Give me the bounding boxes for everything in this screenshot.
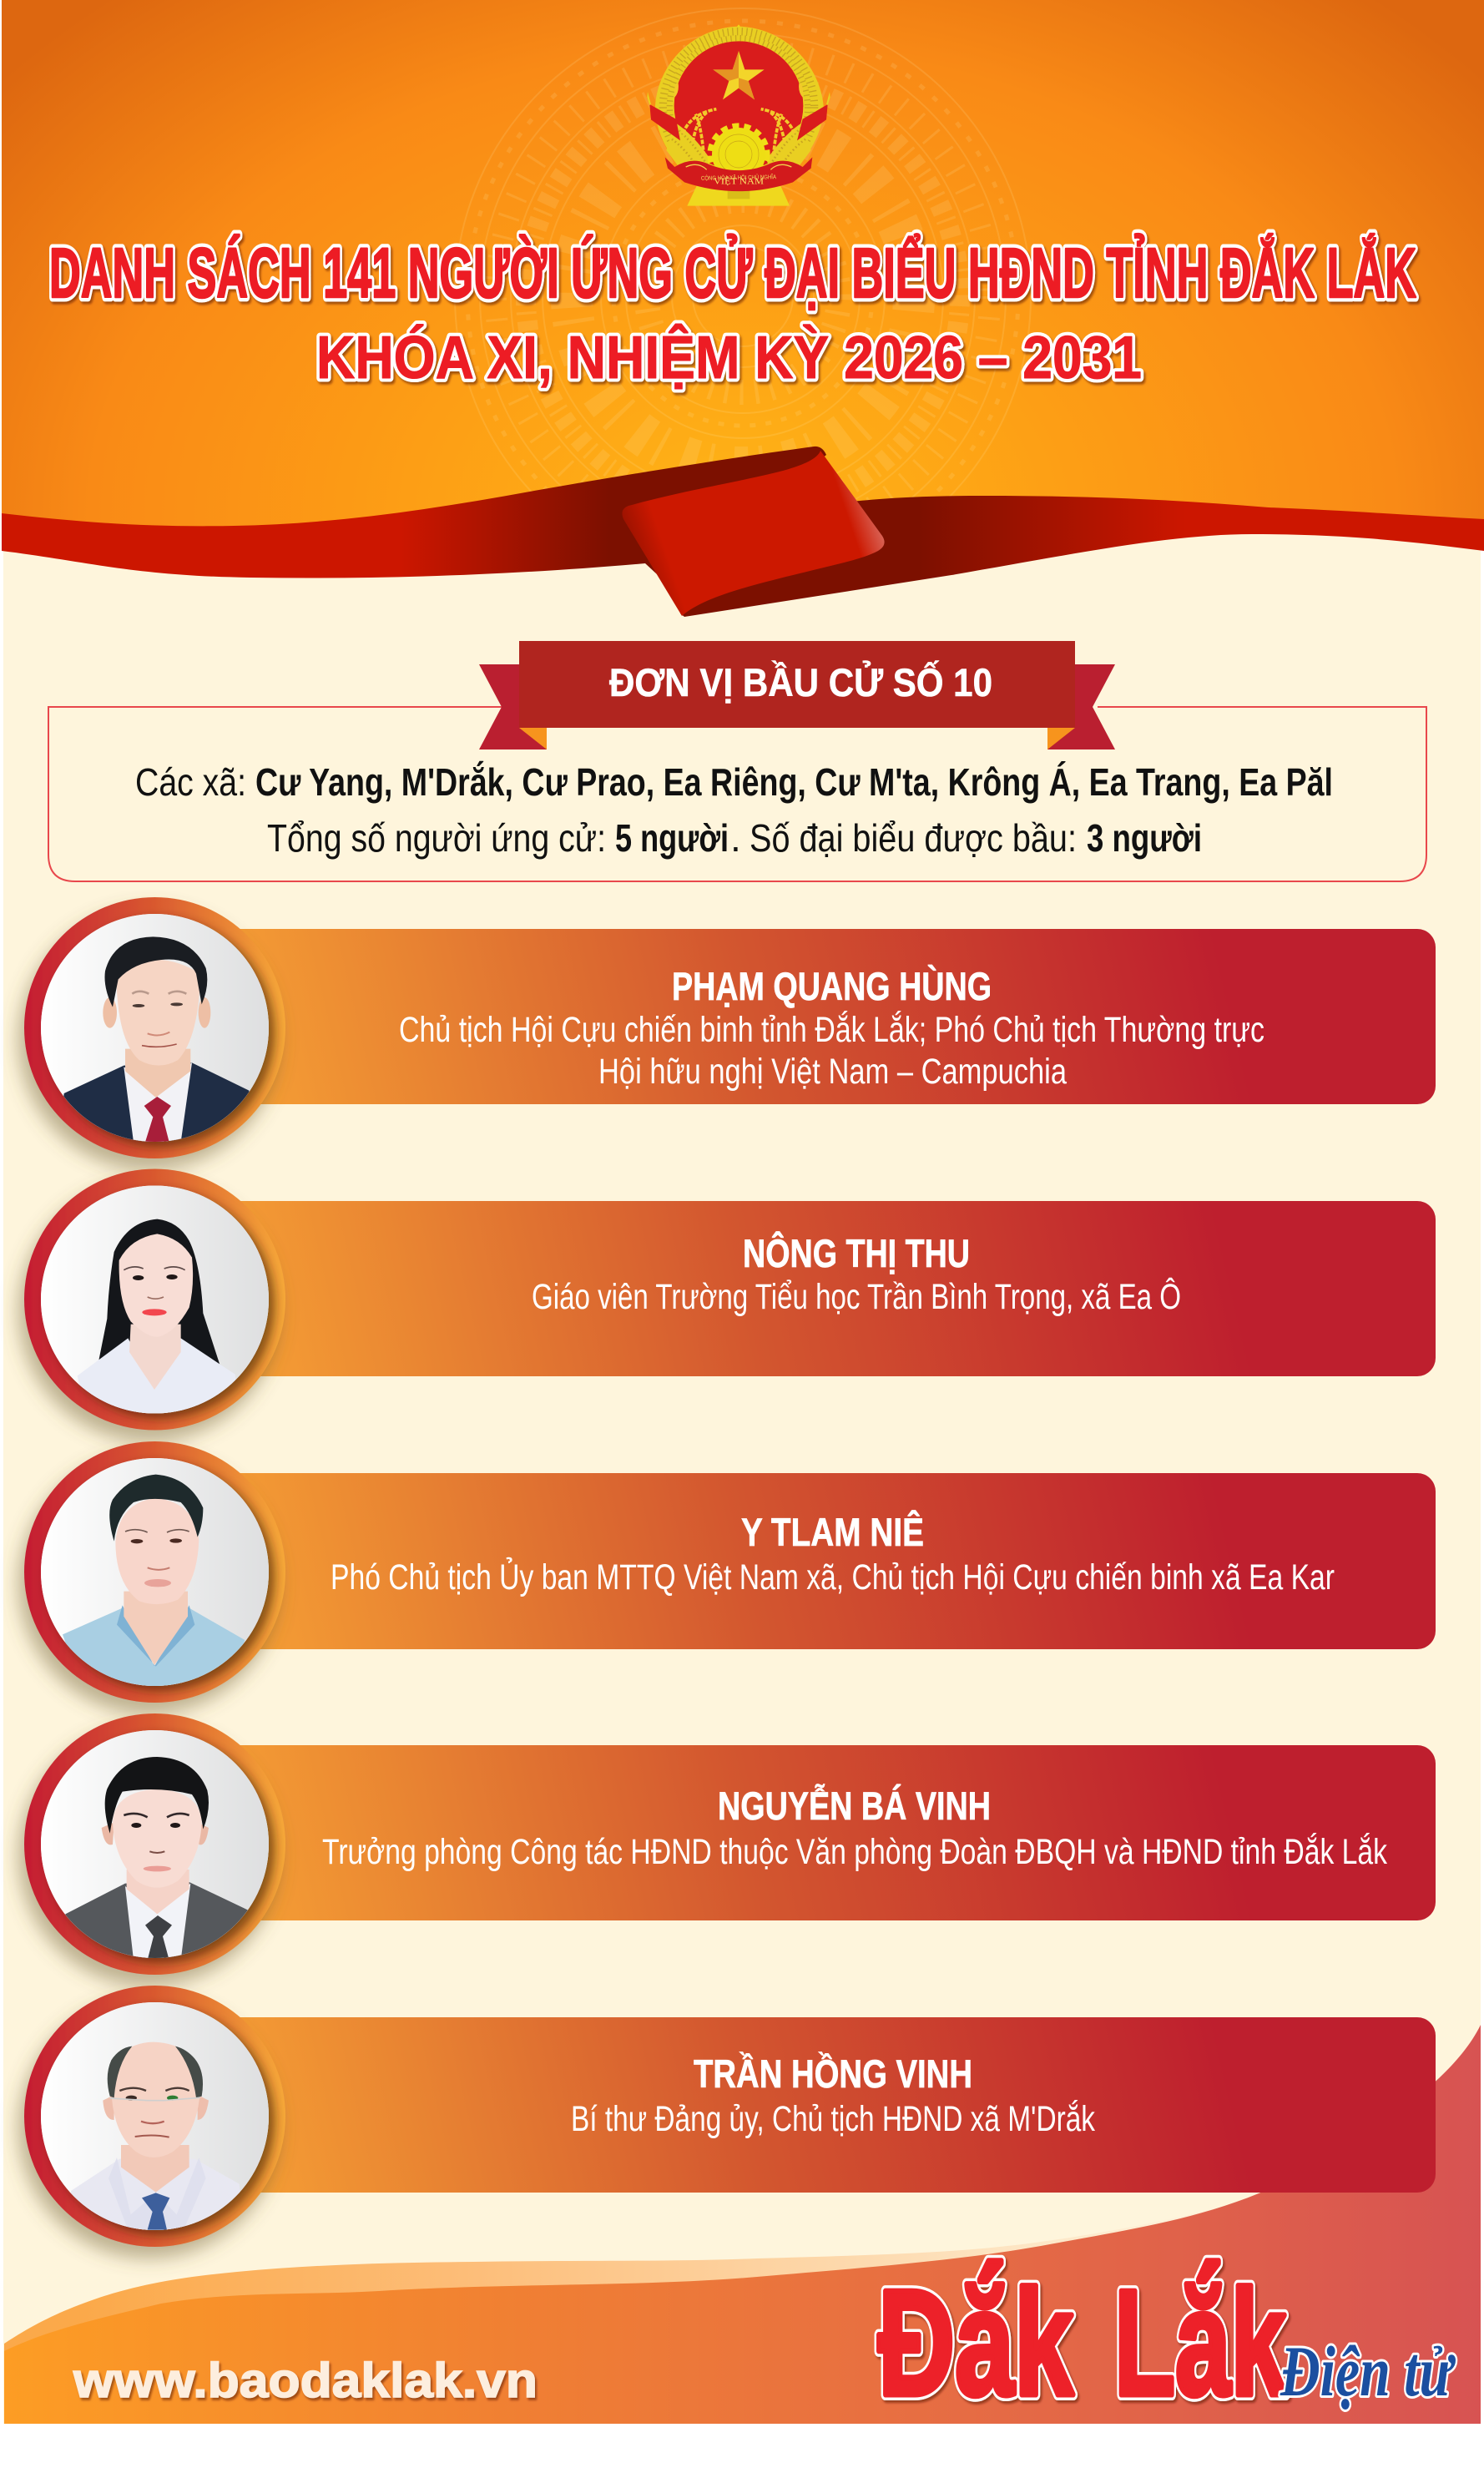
candidate role: Giáo viên Trường Tiểu học Trần Bình Trọng, xã Ea Ô: [532, 1277, 1181, 1317]
candidate row 1: [24, 897, 1436, 1158]
portrait photo backing: [41, 1458, 269, 1686]
portrait ring: [24, 1441, 285, 1703]
candidate name: TRẦN HỒNG VINH: [694, 2051, 972, 2096]
ribbon cream under-fill: [3, 517, 1481, 651]
role line 2: Hội hữu nghị Việt Nam – Campuchia: [598, 1052, 1067, 1092]
star: [713, 51, 765, 99]
section banner: [48, 641, 1426, 881]
totals line: [267, 816, 1202, 860]
header panel: [2, 0, 1484, 584]
header orange background: [2, 0, 1484, 543]
portrait ring: [24, 1986, 285, 2247]
title line 2: KHÓA XI, NHIỆM KỲ 2026 – 2031: [316, 324, 1142, 391]
logo word 2: [1114, 2259, 1287, 2427]
portrait ring: [24, 1713, 285, 1975]
portrait photo backing: [41, 1730, 269, 1958]
candidate role: [399, 1010, 1264, 1092]
title line 2: KHÓA XI, NHIỆM KỲ 2026 – 2031: [316, 324, 1142, 391]
page cream background: [3, 534, 1481, 2424]
portrait: Tran Hong Vinh: [41, 2002, 269, 2231]
totals line: 3 người: [1087, 816, 1202, 860]
portrait photo backing: [41, 2002, 269, 2230]
portrait photo backing: [41, 914, 269, 1142]
logo: Dak Lak Dien tu: [878, 2259, 1456, 2427]
bronze drum pattern: [454, 8, 1032, 501]
portrait photo backing: [41, 1185, 269, 1414]
candidate row 5: [24, 1986, 1436, 2247]
candidate name: Y TLAM NIÊ: [741, 1510, 924, 1554]
logo word 2: Lắk: [1114, 2259, 1287, 2427]
ribbon right span: [680, 496, 1484, 617]
national emblem: [647, 24, 830, 206]
ribbon left span: [2, 447, 826, 584]
side bands: [649, 104, 680, 140]
gear: [710, 126, 767, 183]
banner heading: ĐƠN VỊ BẦU CỬ SỐ 10: [609, 660, 992, 704]
candidate row 3: [24, 1441, 1436, 1703]
ribbon fold left: [519, 728, 547, 749]
totals line: 5 người: [615, 816, 729, 860]
name bar: [167, 2017, 1436, 2193]
ribbon tail right: [1047, 664, 1115, 749]
scroll: [665, 157, 812, 191]
ribbon tail left: [479, 664, 547, 749]
rice: [683, 109, 795, 156]
name bar: [167, 1201, 1436, 1376]
name bar: [167, 1745, 1436, 1920]
totals line: Số đại biểu được bầu:: [750, 816, 1077, 860]
portrait: Pham Quang Hung: [41, 914, 269, 1143]
red ribbon: [2, 447, 1484, 651]
portrait ring: [24, 1168, 285, 1431]
candidate name: PHẠM QUANG HÙNG: [672, 964, 992, 1008]
candidate row 2: [24, 1168, 1436, 1431]
candidate role: Bí thư Đảng ủy, Chủ tịch HĐND xã M'Drắk: [571, 2099, 1095, 2139]
national emblem: VIỆT NAM: [714, 177, 764, 187]
info box: [48, 707, 1426, 881]
candidate name: NÔNG THỊ THU: [743, 1231, 970, 1275]
ribbon fold front: [622, 451, 885, 616]
candidate name: NGUYỄN BÁ VINH: [718, 1784, 991, 1828]
name bar: [167, 1473, 1436, 1649]
website address: www.baodaklak.vn: [73, 2354, 538, 2408]
totals line: .: [730, 816, 741, 860]
portrait ring: [24, 897, 285, 1158]
portrait: Nong Thi Thu: [41, 1185, 269, 1419]
portrait: Nguyen Ba Vinh: [41, 1730, 269, 1961]
role line 1: Chủ tịch Hội Cựu chiến binh tỉnh Đắk Lắk; Phó Chủ tịch Thường trực: [399, 1010, 1264, 1050]
logo word 2: Lắk: [1114, 2259, 1287, 2427]
name bar: [167, 929, 1436, 1104]
communes line: Các xã:: [135, 760, 246, 804]
national emblem: CỘNG HÒA XÃ HỘI CHỦ NGHĨA: [701, 173, 776, 182]
portrait: Y Tlam Nie: [41, 1458, 269, 1694]
ribbon fold right: [1047, 728, 1075, 749]
footer light wave: [4, 2170, 1335, 2424]
erase line behind ribbon: [502, 701, 1098, 713]
banner body: [519, 641, 1075, 728]
footer main wave: [4, 2025, 1481, 2424]
logo word 1: Đắk: [878, 2259, 1074, 2427]
candidate row 4: [24, 1713, 1436, 1975]
footer panel: [4, 2025, 1481, 2427]
logo word 1: Đắk: [878, 2259, 1074, 2427]
totals line: Tổng số người ứng cử:: [267, 816, 606, 860]
